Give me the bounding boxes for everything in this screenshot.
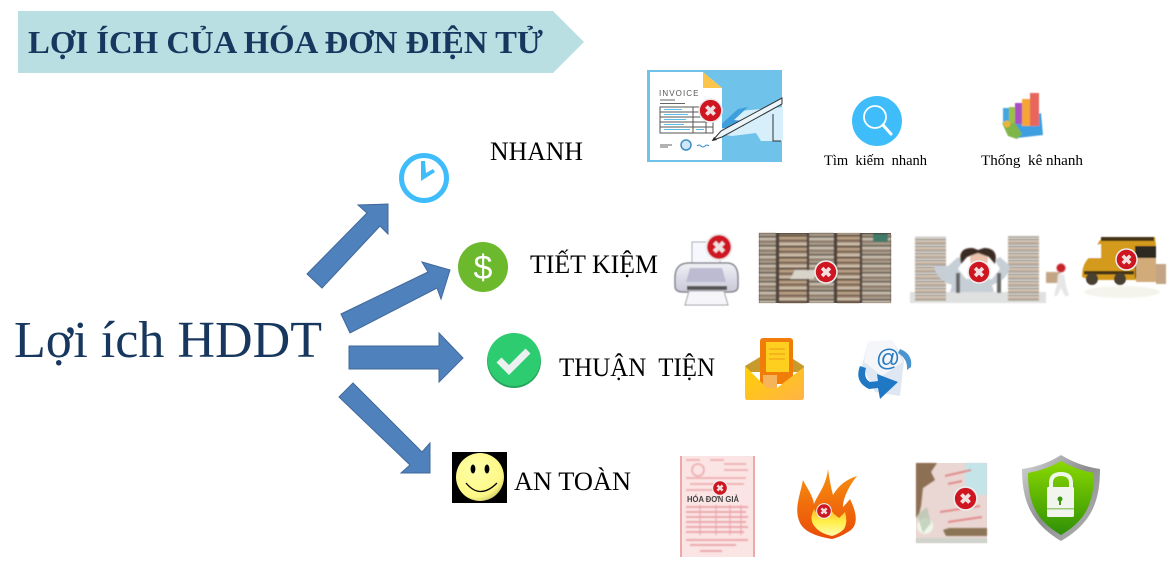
arrow: to TIẾT KIỆM [341, 262, 450, 333]
image: paper stacks [759, 233, 891, 303]
caption: statistics: Thống kê nhanh [981, 153, 1083, 169]
label: THUẬN TIỆN: THUẬN TIỆN [559, 353, 715, 382]
title text: LỢI ÍCH CỦA HÓA ĐƠN ĐIỆN TỬ [28, 24, 544, 60]
image: burnt invoice [916, 463, 987, 543]
icon: search [852, 96, 902, 146]
image: invoice signing: INVOICE [659, 89, 700, 98]
image: stressed worker among papers [910, 236, 1046, 303]
main label: Lợi ích HDDT [14, 312, 322, 369]
icon: statistics [1002, 93, 1043, 139]
label: TIẾT KIỆM: TIẾT KIỆM [530, 250, 658, 279]
label: NHANH: NHANH [490, 137, 583, 166]
image: delivery figure [1046, 264, 1069, 296]
icon: envelope with document [745, 338, 804, 400]
image: invoice signing [647, 70, 783, 162]
arrow: to AN TOÀN [339, 383, 430, 473]
image: printer [675, 233, 738, 305]
arrows to four benefits [307, 204, 463, 473]
caption: search: Tìm kiếm nhanh [824, 153, 927, 169]
icon: green check [487, 333, 541, 388]
icon: clock [402, 156, 446, 200]
title banner [18, 11, 584, 73]
image: fake invoice: HÓA ĐƠN GIẢ [687, 493, 739, 504]
image: delivery truck [1082, 237, 1166, 298]
arrow: to THUẬN TIỆN [349, 333, 463, 382]
icon: security shield [1022, 455, 1100, 541]
label: AN TOÀN: AN TOÀN [514, 467, 631, 496]
icon: smiley [452, 452, 507, 503]
icon: email @ [858, 340, 911, 399]
icon: email @: @ [876, 345, 900, 372]
image: fire [797, 469, 857, 539]
arrow: to NHANH [307, 204, 388, 288]
icon: dollar [458, 242, 508, 292]
image: fake invoice [680, 456, 755, 557]
icon: dollar: $ [474, 249, 493, 287]
